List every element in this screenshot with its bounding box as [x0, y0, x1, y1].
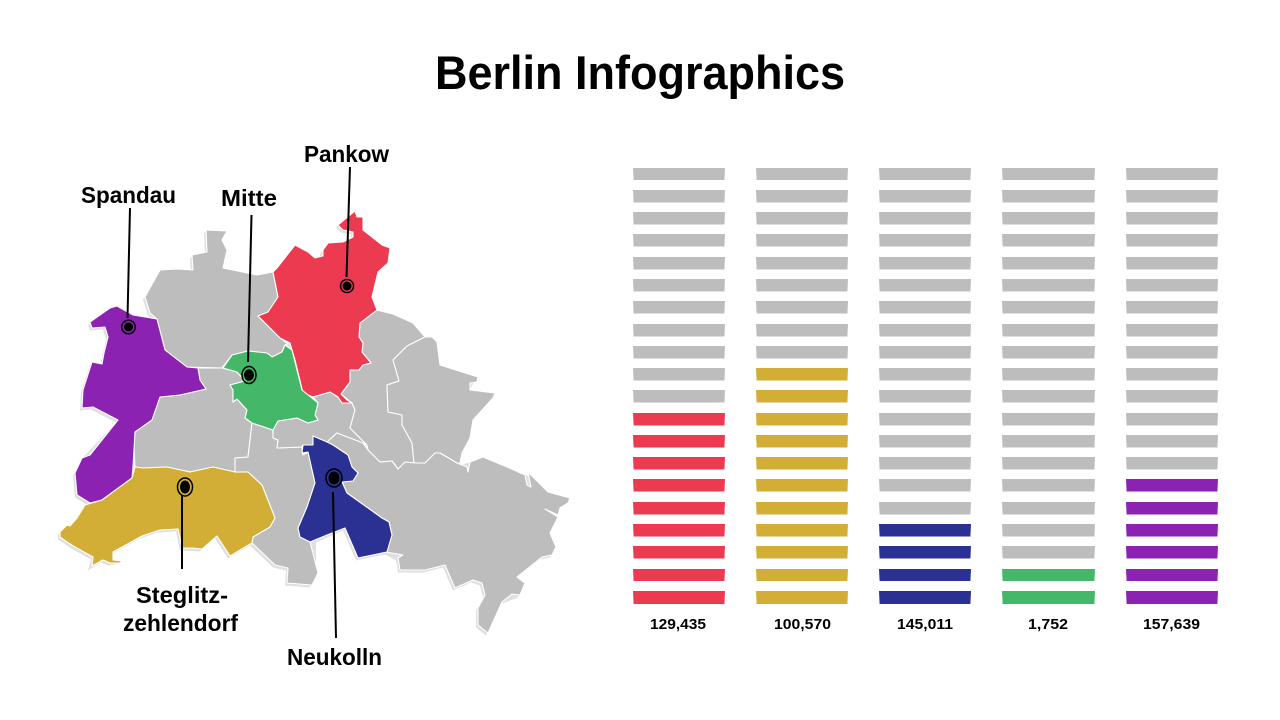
district: Steglitz-Zehlendorf — [60, 467, 275, 566]
callout: Neukolln — [287, 469, 382, 670]
district: Charlottenburg-Wilmersdorf — [133, 368, 252, 472]
district: Treptow-Koepenick — [327, 433, 570, 633]
callout: Neukolln: Neukolln — [287, 644, 382, 670]
title: Berlin Infographics — [435, 46, 845, 99]
map of Berlin — [58, 211, 570, 636]
column: 145,011 (Neukolln) — [879, 168, 971, 633]
column: 157,639 (Spandau) — [1126, 168, 1218, 633]
column: 145,011 (Neukolln): 145,011 — [897, 616, 953, 633]
district: Tempelhof-Schoeneberg — [235, 423, 318, 585]
district: Spandau — [75, 306, 206, 503]
callout: Mitte: Mitte — [221, 185, 277, 211]
column: 100,570 (Steglitz-zehlendorf) — [756, 168, 848, 633]
map shadow — [58, 214, 568, 636]
district: Lichtenberg — [341, 310, 425, 469]
callout: Mitte — [221, 185, 277, 384]
callout: Pankow — [304, 141, 389, 292]
district: Reinickendorf — [145, 230, 288, 368]
district: Friedrichshain-Kreuzberg — [273, 392, 367, 448]
district: Mitte — [223, 345, 318, 430]
callout: Spandau — [81, 182, 176, 334]
callout: Steglitz-zehlendorf: Steglitz- — [136, 582, 228, 608]
column: 1,752 (Mitte): 1,752 — [1028, 616, 1068, 633]
district: Neukolln — [298, 436, 392, 558]
callout: Steglitz-zehlendorf: zehlendorf — [123, 610, 238, 636]
district: Marzahn-Hellersdorf — [387, 337, 495, 463]
district: Pankow — [258, 211, 390, 403]
column: 129,435 (Pankow) — [633, 168, 725, 633]
callout: Spandau: Spandau — [81, 182, 176, 208]
callout: Steglitz-zehlendorf — [123, 478, 238, 636]
column: 129,435 (Pankow): 129,435 — [650, 616, 706, 633]
column: 100,570 (Steglitz-zehlendorf): 100,570 — [774, 616, 831, 633]
column: 1,752 (Mitte) — [1002, 168, 1095, 633]
column: 157,639 (Spandau): 157,639 — [1143, 616, 1200, 633]
callout: Pankow: Pankow — [304, 141, 389, 167]
